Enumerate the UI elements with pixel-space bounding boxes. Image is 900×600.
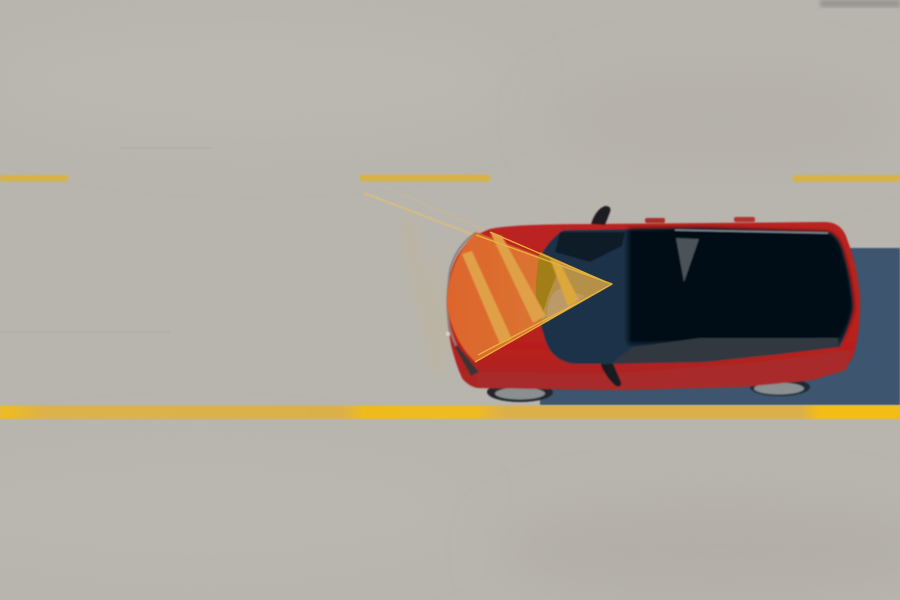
windscreen reflections	[555, 232, 625, 262]
car shadow	[540, 248, 900, 405]
cone outline	[475, 232, 612, 362]
rear wheel	[750, 378, 810, 396]
cone fill over windscreen	[537, 252, 612, 324]
car body	[447, 222, 860, 390]
glass canopy	[536, 228, 853, 364]
windscreen light patch	[547, 288, 585, 322]
darker gold band on windscreen	[536, 252, 562, 322]
roof rail clip two	[734, 217, 755, 222]
rear glass strip	[612, 338, 838, 363]
front wheel	[487, 382, 553, 402]
left mirror	[591, 206, 610, 225]
faint projected light beams on the road	[364, 187, 488, 375]
lower body panel	[477, 350, 850, 390]
rear wheel rim	[754, 382, 804, 394]
roof top highlight	[675, 230, 828, 233]
hood edge	[448, 233, 476, 346]
right mirror	[601, 361, 621, 386]
detection cone overlay	[447, 232, 612, 362]
cone stripes	[462, 232, 579, 344]
headlamp accent	[446, 332, 450, 336]
bottom road line	[0, 406, 900, 419]
front bumper trim	[452, 342, 479, 376]
interior reflection	[676, 238, 699, 282]
dark roof area	[628, 228, 853, 344]
roof rail clip one	[645, 218, 665, 223]
front wheel rim	[495, 388, 545, 400]
cone fill over hood	[447, 232, 612, 362]
top lane dashes	[0, 174, 900, 182]
blurred top-right artifact	[820, 0, 900, 7]
car	[446, 206, 860, 402]
